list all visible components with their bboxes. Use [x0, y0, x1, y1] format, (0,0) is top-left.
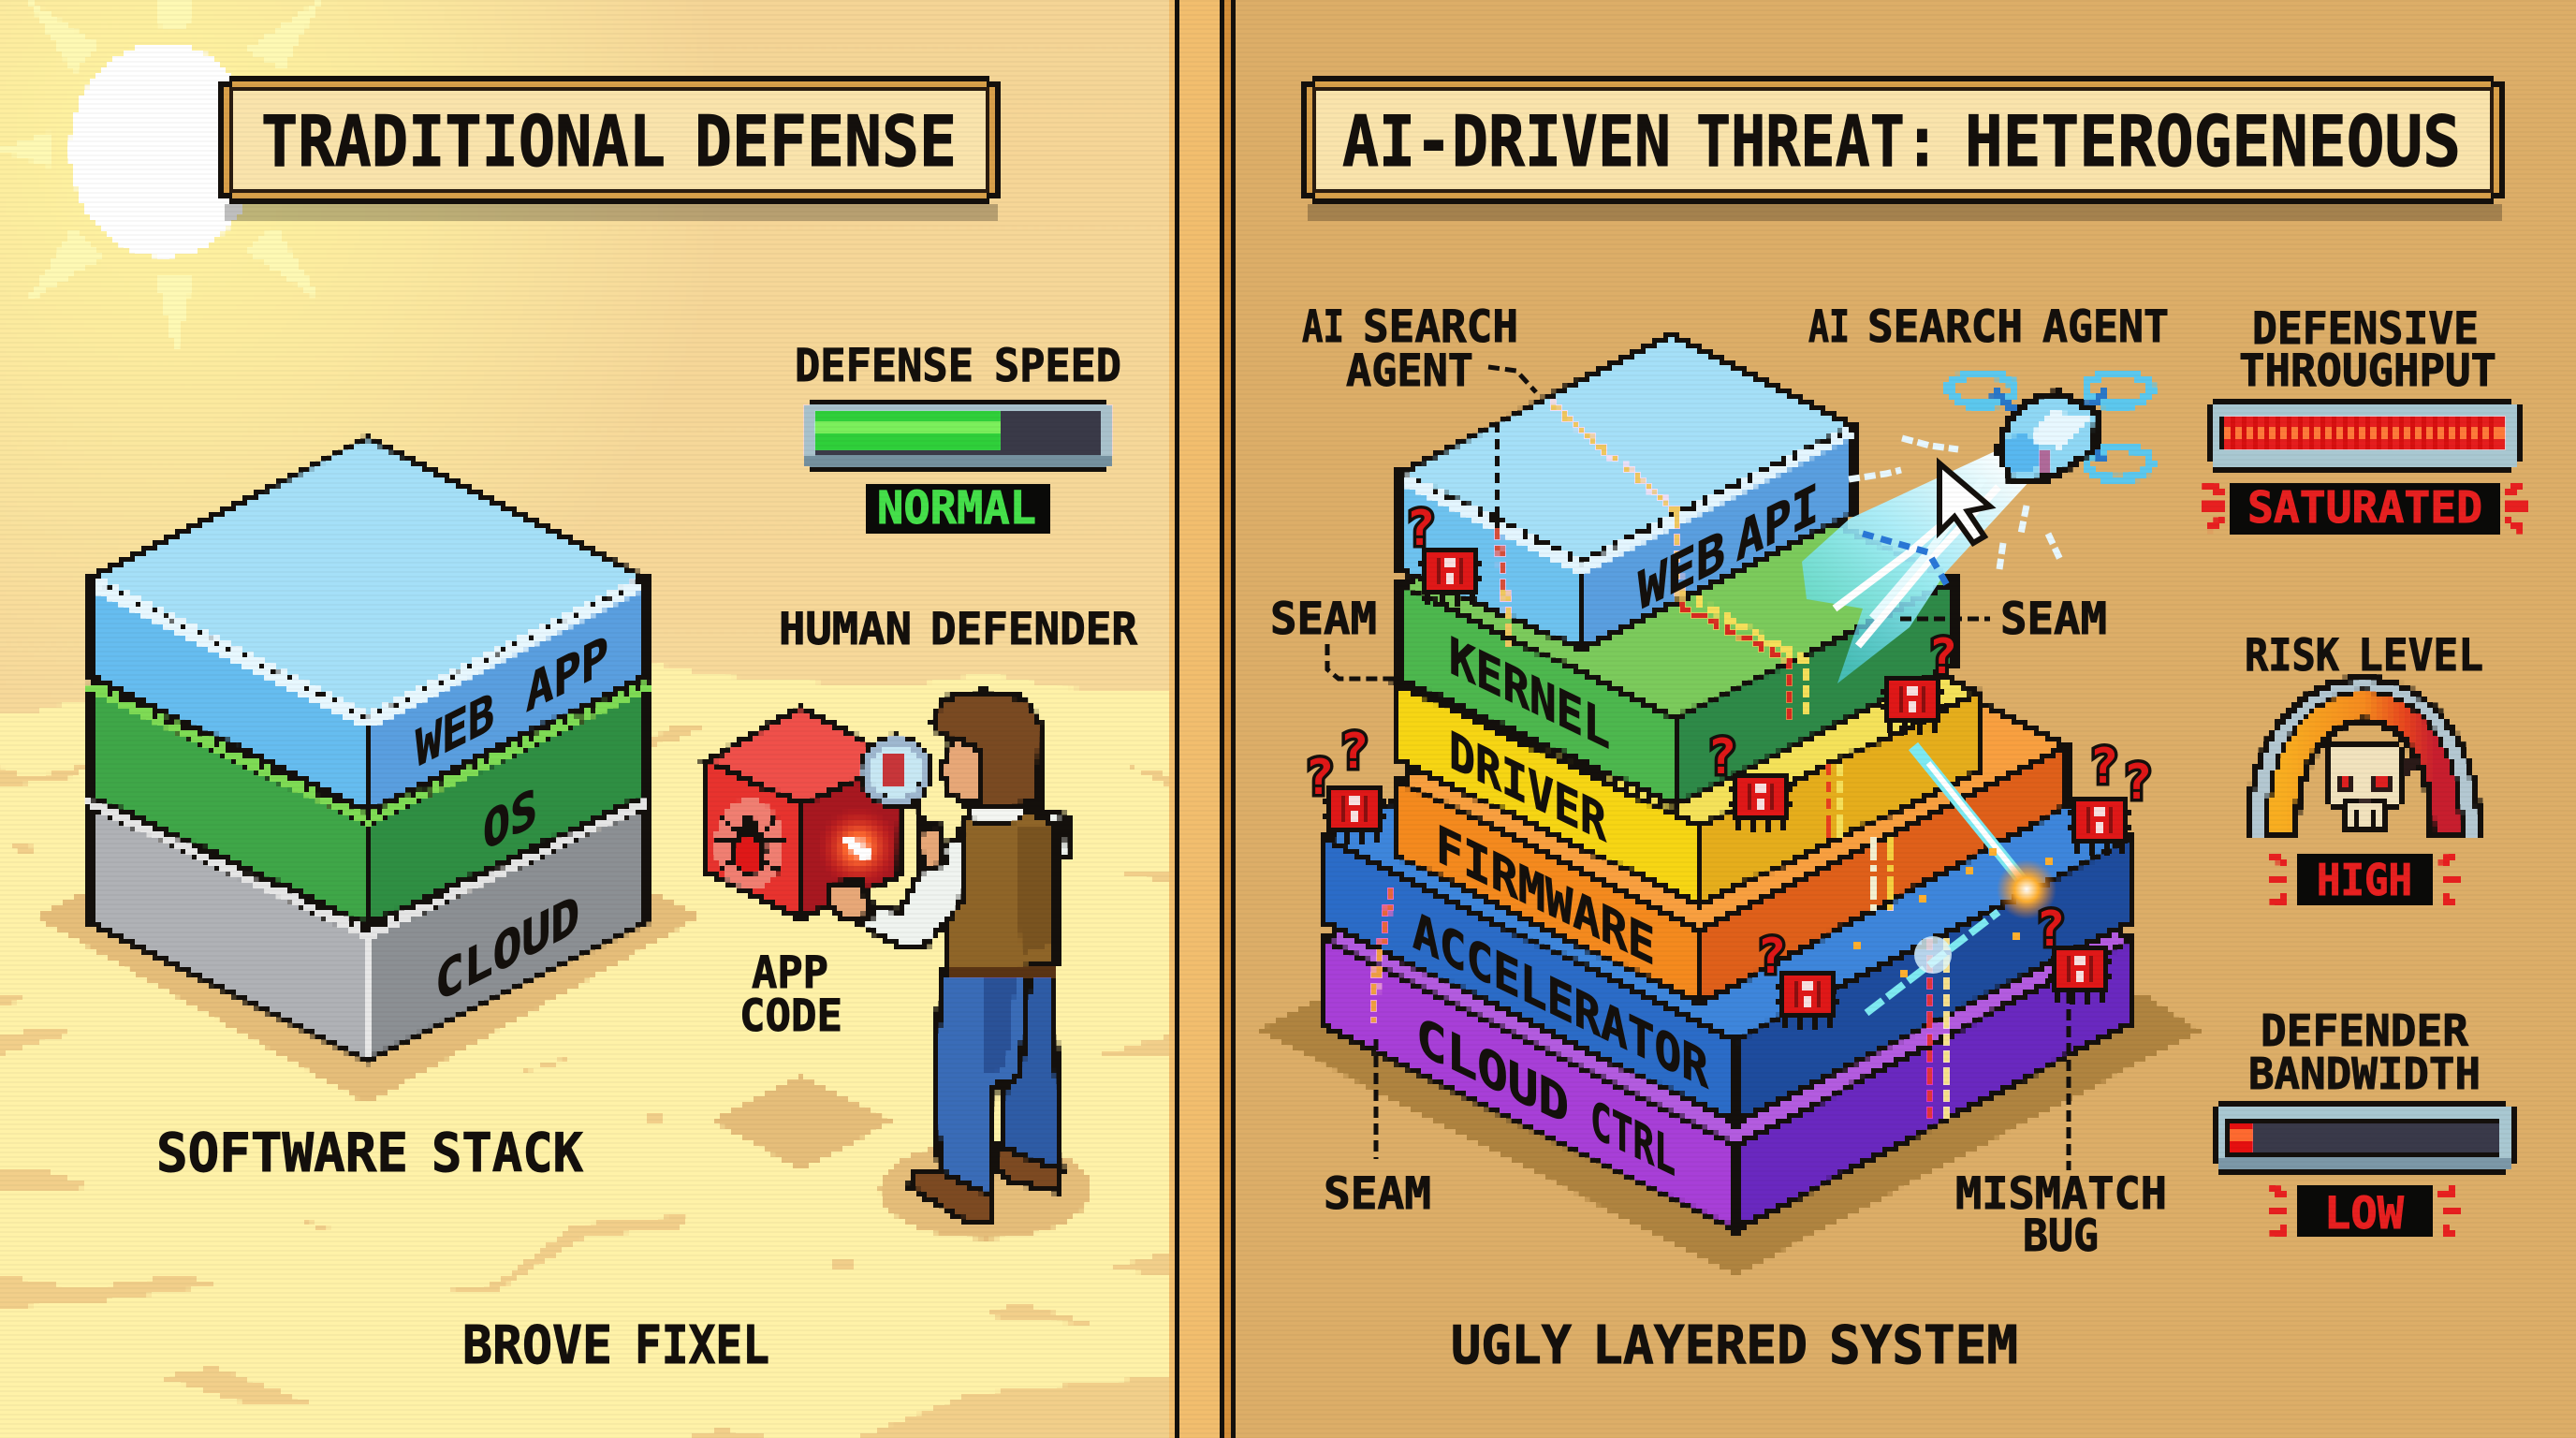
label: ai search agent left: AGENT	[1346, 345, 1473, 397]
label: app code	[739, 947, 842, 1042]
magnifying glass	[864, 740, 929, 833]
label: brove fixel: BROVE	[462, 1315, 612, 1376]
status: saturated box	[2231, 482, 2498, 532]
gauges on right column	[2203, 398, 2526, 1239]
label: ai search agent right: AGENT	[2042, 301, 2169, 353]
alert ticks: high	[2270, 856, 2458, 904]
label: defense speed	[795, 340, 1121, 392]
layer: web app	[90, 437, 646, 811]
shadow: software stack	[33, 749, 702, 1105]
leader lines	[1327, 367, 2069, 1170]
label: risk level: LEVEL	[2358, 630, 2483, 682]
label: kernel: KERNEL	[1449, 625, 1610, 762]
ugly layered system stack	[1322, 335, 2133, 1230]
gauge: defensive throughput bar	[2206, 398, 2523, 471]
bug: accelerator right	[2068, 739, 2152, 856]
status: low: LOW	[2324, 1188, 2405, 1240]
label: defender bandwidth: BANDWIDTH	[2248, 1049, 2481, 1099]
label: ai search agent right: AI	[1808, 301, 1850, 353]
back leg	[992, 970, 1061, 1170]
bug: accelerator left: ?	[1339, 724, 1368, 780]
icon: bug	[713, 800, 784, 889]
heading: traditional defense: TRADITIONAL	[261, 100, 666, 183]
front leg	[934, 970, 1030, 1195]
status: high box	[2297, 854, 2431, 906]
gauge: risk level dial	[2258, 689, 2469, 838]
shadow: human defender	[879, 1140, 1092, 1240]
layer: kernel	[1399, 448, 1954, 805]
label: ai search agent left	[1302, 301, 1518, 397]
label: driver: DRIVER	[1449, 720, 1607, 855]
heading: traditional defense	[261, 100, 957, 183]
hair and head	[932, 691, 1041, 807]
label: web app	[416, 624, 608, 780]
human defender	[827, 691, 1069, 1223]
icon: skull	[2327, 742, 2402, 828]
hand on cube	[827, 882, 872, 919]
label: cloud: CLOUD	[435, 884, 579, 1015]
layer: cloud	[90, 796, 646, 1061]
bug: accelerator left: ?	[1305, 750, 1334, 806]
heading: ai-driven threat: AI-DRIVEN	[1342, 100, 1671, 183]
status: low box	[2297, 1186, 2431, 1239]
label: mismatch bug: BUG	[2023, 1211, 2099, 1262]
layer: cloud ctrl	[1322, 732, 2133, 1230]
bug: cloud ctrl: ?	[2036, 902, 2065, 958]
front shoe	[910, 1170, 992, 1223]
label: ai search agent left: SEARCH	[1363, 301, 1518, 353]
shadow: ugly layered system	[1256, 992, 2202, 1276]
gauge: defense speed bar	[801, 398, 1115, 473]
layer: os	[90, 681, 646, 925]
collar	[970, 803, 1028, 824]
title banner: ai-driven threat	[1301, 76, 2505, 221]
holding arm	[855, 836, 965, 948]
label: defender bandwidth: DEFENDER	[2261, 1005, 2468, 1056]
label: app code: CODE	[739, 990, 842, 1042]
layer: firmware	[1398, 597, 2067, 1004]
divider	[1170, 0, 1236, 1438]
bug: driver	[1707, 729, 1793, 832]
bugs with question marks	[1305, 501, 2152, 1030]
label: app code: APP	[752, 947, 828, 999]
label: seam left: SEAM	[1270, 594, 1377, 645]
label: cloud ctrl: CLOUD	[1416, 1005, 1569, 1137]
drone beam	[1802, 438, 2061, 683]
label: defender bandwidth	[2248, 1005, 2481, 1099]
label: web app: WEB	[416, 682, 494, 780]
title banner: traditional defense	[218, 76, 1001, 221]
label: seam right: SEAM	[2000, 594, 2107, 645]
software stack	[90, 437, 646, 1061]
label: risk level: RISK	[2245, 630, 2340, 682]
label: brove fixel: FIXEL	[635, 1315, 769, 1376]
bug: driver: ?	[1707, 729, 1736, 785]
bug: accelerator right: ?	[2123, 755, 2152, 811]
bug: firmware	[1757, 929, 1839, 1030]
bug: firmware: ?	[1757, 929, 1786, 985]
status: normal box	[864, 482, 1051, 532]
label: accelerator: ACCELERATOR	[1412, 901, 1709, 1101]
bug: kernel right	[1881, 629, 1957, 735]
cursor icon	[1939, 463, 1990, 543]
status: high: HIGH	[2317, 855, 2412, 905]
label: ai search agent right: SEARCH	[1867, 301, 2023, 353]
label: ugly layered system	[1451, 1315, 2018, 1376]
label: defensive throughput	[2239, 303, 2496, 397]
label: ugly layered system: LAYERED	[1592, 1315, 1808, 1376]
shadow: diamond	[710, 1075, 896, 1171]
label: software stack	[156, 1123, 584, 1184]
back shoe	[998, 1146, 1060, 1192]
heading: ai-driven threat: HETEROGENEOUS	[1965, 100, 2461, 183]
heading: traditional defense: DEFENSE	[695, 100, 957, 183]
seam traces	[1374, 403, 1946, 1123]
alert ticks: low	[2270, 1189, 2458, 1236]
bug: web api: ?	[1406, 501, 1435, 557]
status: normal: NORMAL	[877, 482, 1036, 535]
icon: glowing exploit	[819, 808, 898, 887]
bug: web api	[1406, 501, 1482, 607]
label: web api	[1638, 473, 1819, 624]
heading: ai-driven threat	[1342, 100, 2461, 183]
bug: cloud ctrl	[2036, 902, 2112, 1005]
raised hand	[917, 824, 945, 871]
label: ugly layered system: UGLY	[1451, 1315, 1572, 1376]
label: cloud ctrl	[1416, 1005, 1676, 1188]
label: human defender: HUMAN	[779, 604, 912, 655]
layer: accelerator	[1322, 636, 2133, 1123]
panel: left background	[0, 0, 1172, 1438]
label: risk level	[2245, 630, 2483, 682]
alert ticks: saturated	[2203, 485, 2526, 530]
label: web api: WEB	[1638, 520, 1725, 624]
label: cloud ctrl: CTRL	[1590, 1089, 1676, 1188]
label: web api: API	[1736, 473, 1819, 575]
label: ai search agent right	[1808, 301, 2169, 353]
layer: driver	[1398, 550, 1980, 904]
drone	[1949, 374, 2151, 481]
label: mismatch bug: MISMATCH	[1955, 1168, 2167, 1220]
label: software stack: STACK	[432, 1123, 584, 1184]
label: defensive throughput: THROUGHPUT	[2239, 345, 2496, 397]
app code cube with bug	[707, 707, 900, 918]
label: seam bottom: SEAM	[1324, 1168, 1431, 1220]
sun	[0, 0, 320, 353]
shirt back	[1039, 809, 1069, 858]
label: human defender: DEFENDER	[930, 604, 1138, 655]
bug: kernel right: ?	[1928, 629, 1957, 685]
label: human defender	[779, 604, 1138, 655]
label: software stack: SOFTWARE	[156, 1123, 408, 1184]
label: defense speed: SPEED	[994, 340, 1121, 392]
sand ground	[0, 665, 1172, 1438]
impact streaks and sparks	[1853, 746, 2057, 1013]
status: saturated: SATURATED	[2247, 482, 2482, 533]
label: firmware: FIRMWARE	[1436, 814, 1655, 977]
bug: accelerator left	[1305, 724, 1386, 844]
label: os: OS	[483, 777, 537, 863]
layer: web api	[1399, 335, 1854, 649]
vest	[944, 811, 1056, 976]
bug: accelerator right: ?	[2089, 739, 2118, 795]
label: web app: APP	[526, 624, 608, 725]
label: defensive throughput: DEFENSIVE	[2252, 303, 2479, 355]
heading: ai-driven threat: THREAT:	[1696, 100, 1939, 183]
gauge: defender bandwidth bar	[2211, 1100, 2517, 1175]
label: ai search agent left: AI	[1302, 301, 1344, 353]
label: ugly layered system: SYSTEM	[1829, 1315, 2018, 1376]
label: defense speed: DEFENSE	[795, 340, 973, 392]
label: mismatch bug	[1955, 1168, 2167, 1262]
label: brove fixel	[462, 1315, 769, 1376]
panel: right background	[1234, 0, 2576, 1438]
